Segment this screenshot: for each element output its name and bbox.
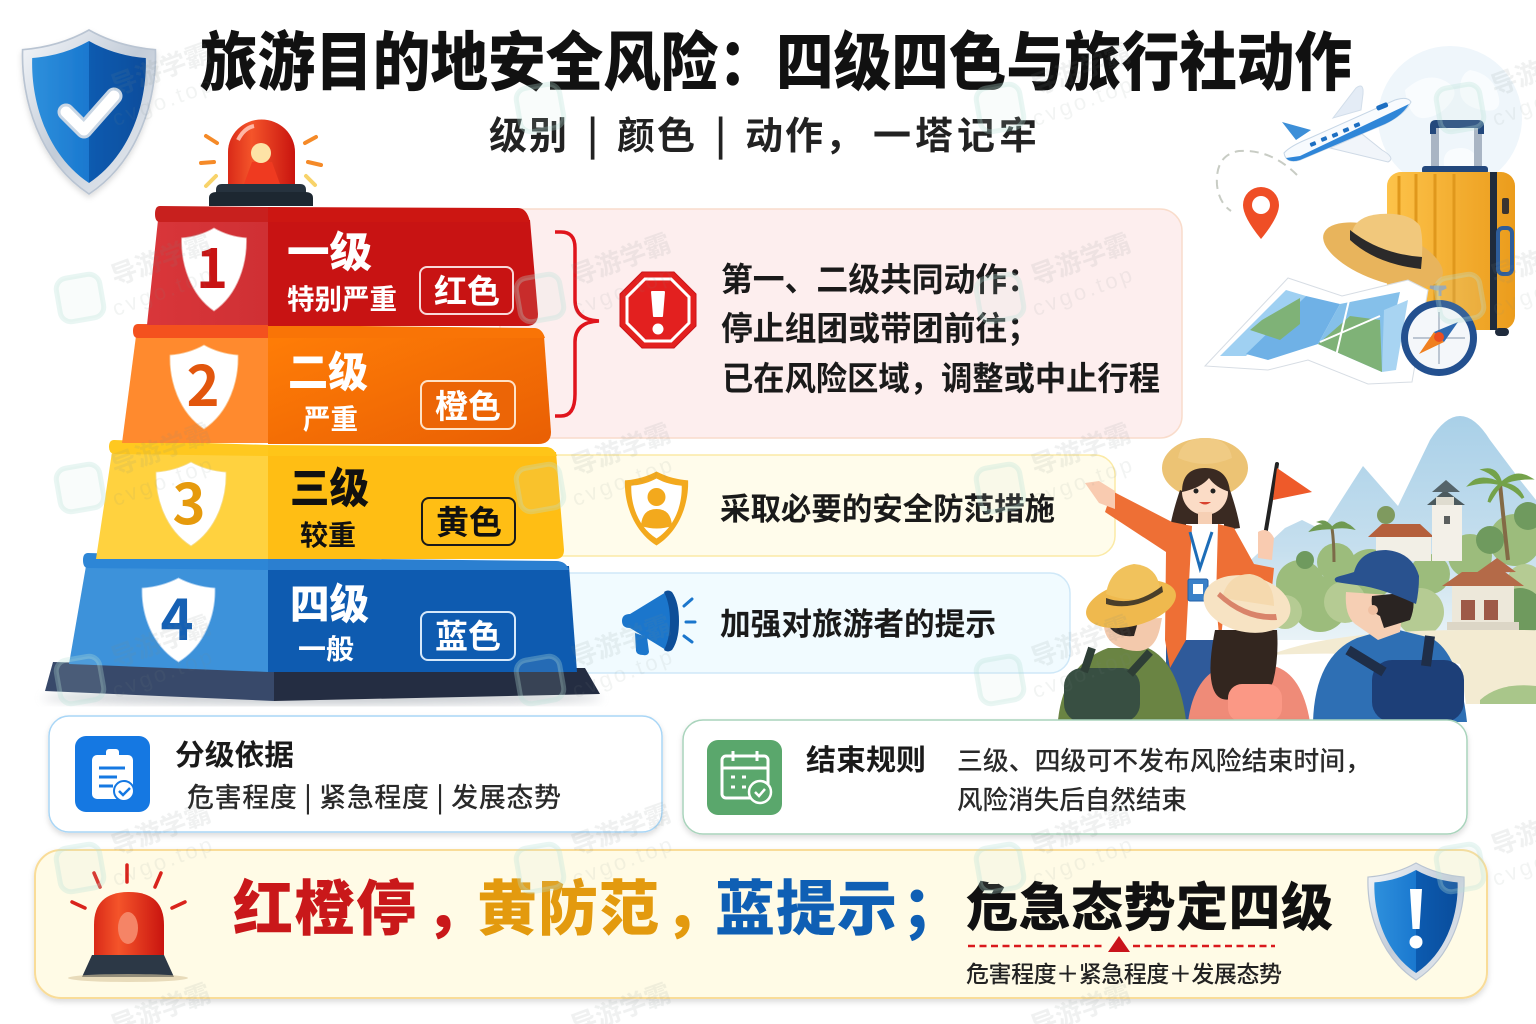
icon: green calendar [707,740,782,815]
level label 二级 严重 [288,339,368,438]
text: level 3 action: 采取必要的安全防范措施 [720,484,1055,529]
subtitle: | [587,105,600,160]
colour tag orange [421,380,515,429]
icon: stop sign with exclamation [620,272,696,348]
dashed flight path [1217,151,1297,211]
level label 三级 较重: 较重 [300,514,356,554]
mnemonic: red orange stop: ， [425,861,486,948]
small palm [1312,522,1352,562]
base plinth [42,662,602,704]
colour tag yellow [422,496,515,545]
infographic canvas: cvgo.top [1029,451,1138,511]
infographic canvas: 导游学霸 [565,223,676,293]
infographic canvas: cvgo.top [1029,71,1138,131]
icon: red siren [68,865,188,982]
infographic canvas: 导游学霸 [105,413,216,483]
illustration: scenic background with mountains and temples [1240,416,1536,704]
infographic canvas: 导游学霸 [1025,223,1136,293]
icon: blue clipboard [75,736,150,812]
infographic canvas: 导游学霸 [1025,793,1136,863]
tier 3 yellow [96,440,564,559]
mnemonic: blue remind: 蓝提示 [715,861,898,948]
shield number 1: 1 [196,225,228,304]
tier 2 orange [122,324,551,444]
shield number 4: 4 [160,576,194,657]
lower pavilion [1442,558,1524,630]
icon: top left blue shield with check [22,30,156,194]
infographic canvas: 导游学霸 [105,793,216,863]
text: end rule detail: 三级、四级可不发布风险结束时间， [957,741,1371,778]
text: shared actions: 已在风险区域，调整或中止行程 [722,352,1160,400]
folded map [1205,278,1428,384]
guide lanyard [1190,532,1212,568]
infographic canvas: cvgo.top [569,451,678,511]
decoration: globe behind title [1378,46,1522,190]
guide jacket [1105,491,1192,668]
text: shared actions [721,253,1160,400]
brace joining level 1 and 2 [555,232,599,416]
shield number 4 [142,576,215,662]
infographic canvas: cvgo.top [109,451,218,511]
colour tag red [420,265,513,314]
icon: map pin [1243,187,1279,239]
subtitle: 级别 [489,105,569,160]
panel: level 3 action [520,455,1115,556]
mnemonic: yellow guard: 黄防范 [477,861,660,948]
title: 旅游目的地安全风险：四级四色与旅行社动作 [200,12,1352,104]
infographic canvas: 导游学霸 [565,605,676,675]
heading: end rule: 结束规则 [806,737,926,779]
icon: red siren on top of pyramid [201,120,321,206]
subtitle: 动作， [745,105,865,160]
text: level 4 action: 加强对旅游者的提示 [720,599,996,644]
colour tag yellow: 黄色 [436,496,502,544]
suitcase [1387,120,1515,336]
panel: grading basis card [49,716,662,832]
compass [1401,287,1477,376]
infographic canvas: cvgo.top [109,71,218,131]
mnemonic: decide four levels by situation: 危急态势定四级 [966,866,1333,941]
infographic canvas: 导游学霸 [1025,413,1136,483]
colour tag orange: 橙色 [435,380,501,428]
infographic canvas: 导游学霸 [565,793,676,863]
colour tag blue: 蓝色 [435,610,501,658]
subtitle: 颜色 [617,105,697,160]
infographic canvas: 导游学霸 [105,33,216,103]
illustration: plane, map, suitcase and travel gear [1205,86,1515,384]
icon: yellow person shield [625,472,688,546]
white temple and tower [1368,480,1465,561]
level label 一级 特别严重 [287,219,397,318]
text: end rule detail: 风险消失后自然结束 [957,780,1187,817]
mnemonic: yellow guard: ， [664,861,725,948]
icon: blue warning shield [1368,863,1464,980]
infographic canvas: cvgo.top [569,831,678,891]
infographic canvas: cvgo.top [569,261,678,321]
text: formula: 危害程度＋紧急程度＋发展态势 [966,955,1282,989]
guide shirt [1186,524,1224,640]
mnemonic: blue remind: ； [902,861,963,948]
infographic canvas: cvgo.top [1029,261,1138,321]
illustration: tourist with cap and blue backpack [1313,550,1467,722]
infographic canvas: cvgo.top [1029,831,1138,891]
guide head [1182,468,1230,524]
shield number 1 [182,225,246,311]
illustration: tour guide with flag [1085,438,1312,722]
panel: level 4 action [530,573,1070,673]
guide hands [1085,481,1115,509]
guide hair back [1170,490,1240,532]
illustration: tourist with straw hat and green jacket [1058,564,1186,722]
level label 三级 较重: 三级 [290,455,369,516]
infographic canvas: cvgo.top [569,643,678,703]
illustration: tourist with pale hat and pink jacket [1188,567,1310,722]
palm tree [1471,470,1529,560]
panel: end rule card [683,720,1467,834]
colour tag red: 红色 [434,265,500,313]
shield number 3 [156,460,226,546]
level label 二级 严重: 严重 [303,398,358,438]
infographic canvas: cvgo.top [109,261,218,321]
level label 二级 严重: 二级 [288,339,368,400]
infographic canvas: 导游学霸 [105,223,216,293]
subtitle: 一塔记牢 [873,105,1041,160]
guide legs [1166,640,1218,722]
infographic canvas: 导游学霸 [1025,605,1136,675]
infographic canvas: cvgo.top [1029,643,1138,703]
panel: summary mnemonic banner [35,850,1487,998]
level label 一级 特别严重: 一级 [287,219,372,280]
icon: megaphone [622,590,695,655]
dashed divider with triangle [968,936,1275,952]
chart: four level pyramid [42,206,602,704]
subtitle: | [715,105,728,160]
tier 4 blue [69,553,577,672]
flag [1262,464,1312,554]
shield number 2: 2 [186,342,220,423]
mnemonic: red orange stop: 红橙停 [233,861,418,948]
guide hat brim [1162,438,1248,498]
colour tag blue [421,610,515,660]
level label 四级 一般: 四级 [290,571,369,632]
infographic canvas: cvgo.top [109,831,218,891]
infographic canvas: cvgo.top [109,643,218,703]
heading: grading basis: 分级依据 [175,732,294,774]
level label 三级 较重 [290,455,369,554]
panel: actions for levels 1 and 2 [500,209,1182,438]
straw hat [1315,209,1451,301]
infographic canvas: 导游学霸 [105,605,216,675]
infographic canvas: 导游学霸 [1025,33,1136,103]
text: end rule detail [957,741,1371,817]
level label 四级 一般 [290,571,369,668]
plane [1282,86,1411,162]
shield number 3: 3 [172,460,206,541]
text: grading factors: 危害程度 | 紧急程度 | 发展态势 [187,776,561,815]
shield number 2 [170,342,238,429]
text: shared actions: 第一、二级共同动作： [721,253,1039,301]
tier 1 red [147,206,538,326]
text: shared actions: 停止组团或带团前往； [721,302,1039,350]
level label 四级 一般: 一般 [298,628,354,668]
infographic canvas: 导游学霸 [565,413,676,483]
level label 一级 特别严重: 特别严重 [287,278,397,318]
